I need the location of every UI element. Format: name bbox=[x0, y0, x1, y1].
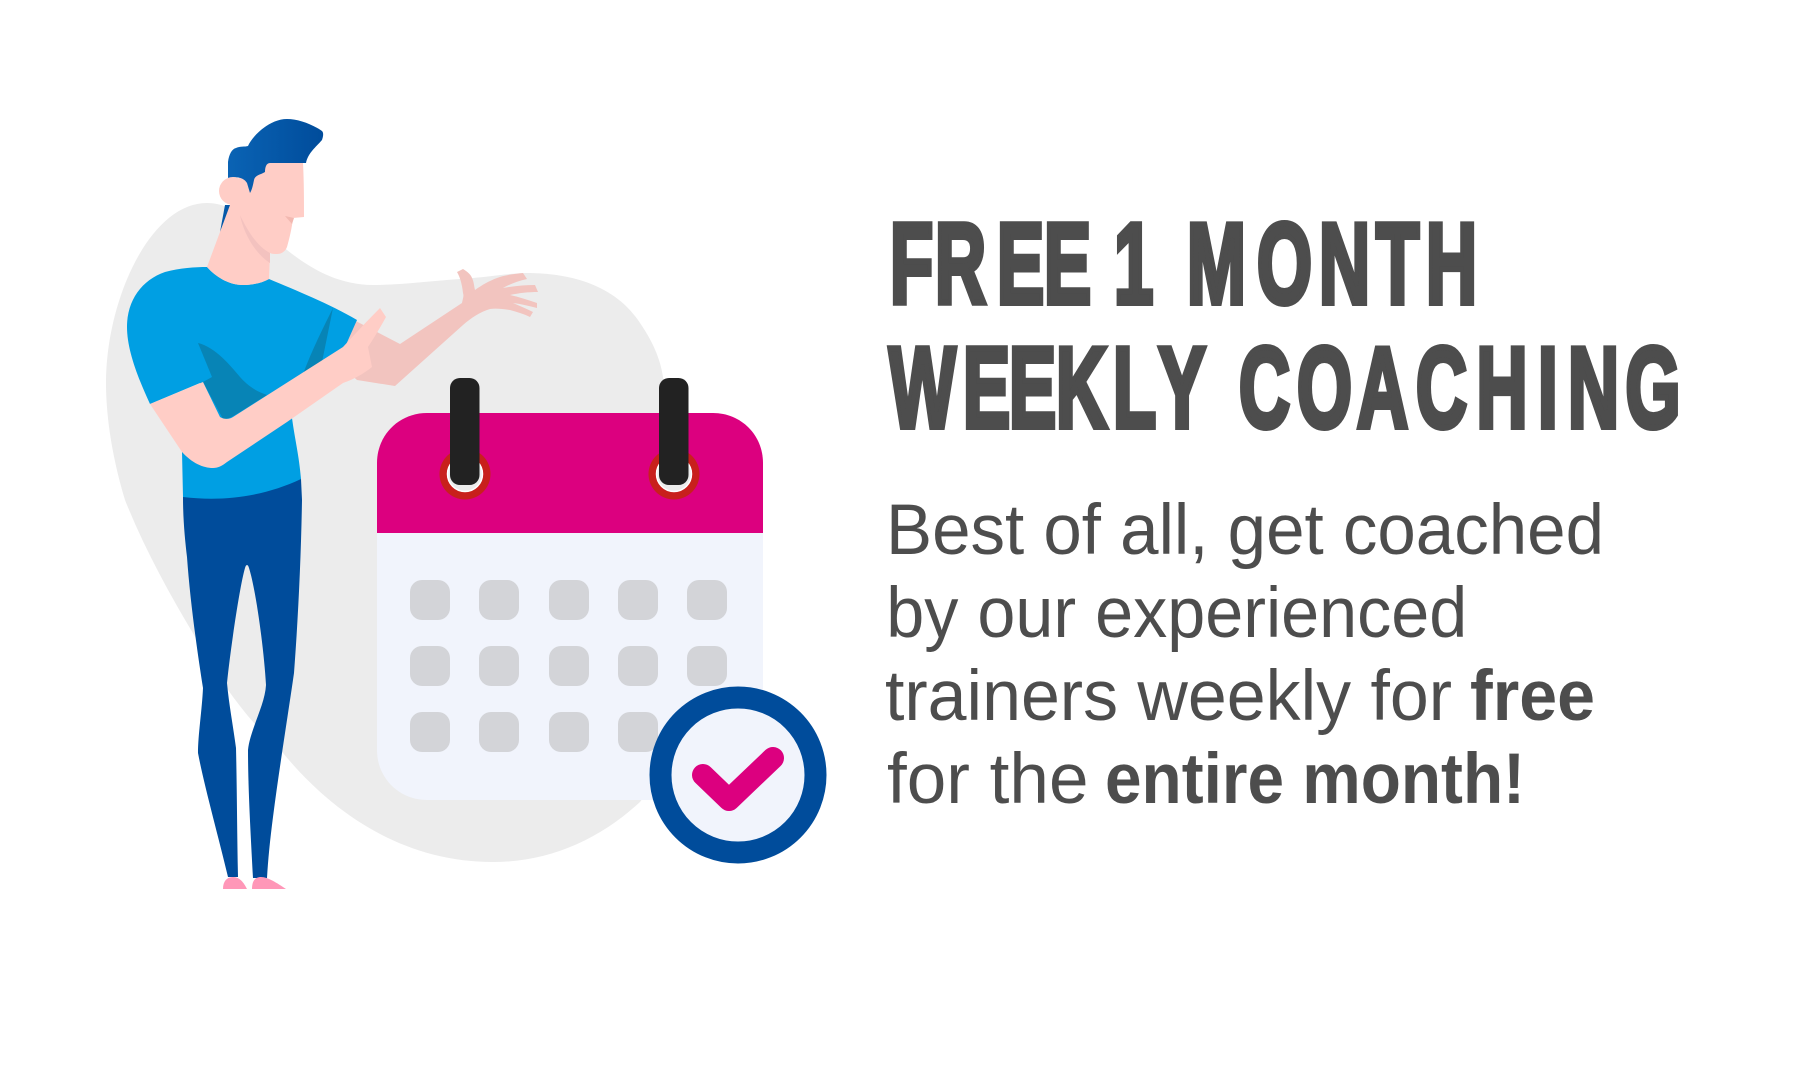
hair bbox=[228, 119, 323, 193]
shirt shadow: sleeve fold bbox=[303, 308, 333, 374]
title: FREE 1 MONTH bbox=[890, 201, 1477, 328]
body text: trainers weekly for bbox=[885, 657, 1452, 736]
body text bbox=[885, 491, 1604, 819]
trousers bbox=[183, 479, 302, 878]
date grid bbox=[410, 580, 727, 752]
calendar header bbox=[377, 413, 763, 533]
body text: for the bbox=[887, 740, 1088, 819]
background blob bbox=[106, 203, 664, 862]
shoes bbox=[223, 877, 286, 889]
title: WEEKLY COACHING bbox=[889, 325, 1680, 452]
t-shirt bbox=[127, 267, 357, 499]
shirt shadow: body fold bbox=[198, 343, 267, 419]
title bbox=[889, 201, 1680, 452]
front arm bbox=[150, 308, 386, 468]
mouth bbox=[285, 216, 294, 224]
body text: free bbox=[1470, 657, 1595, 736]
body text: by our experienced bbox=[886, 574, 1467, 653]
neck and face bbox=[207, 163, 304, 285]
calendar body bbox=[377, 533, 763, 800]
calendar bbox=[377, 378, 763, 800]
body text: Best of all, get coached bbox=[886, 491, 1604, 570]
right binder ring bbox=[648, 378, 700, 500]
body text: entire month! bbox=[1105, 740, 1525, 819]
ear bbox=[219, 177, 247, 205]
hair behind neck bbox=[220, 205, 231, 232]
stubble bbox=[240, 215, 270, 263]
back arm bbox=[335, 269, 538, 386]
left binder ring bbox=[440, 378, 490, 500]
illustration: man pointing bbox=[127, 119, 538, 889]
icon: check badge bbox=[660, 698, 816, 852]
